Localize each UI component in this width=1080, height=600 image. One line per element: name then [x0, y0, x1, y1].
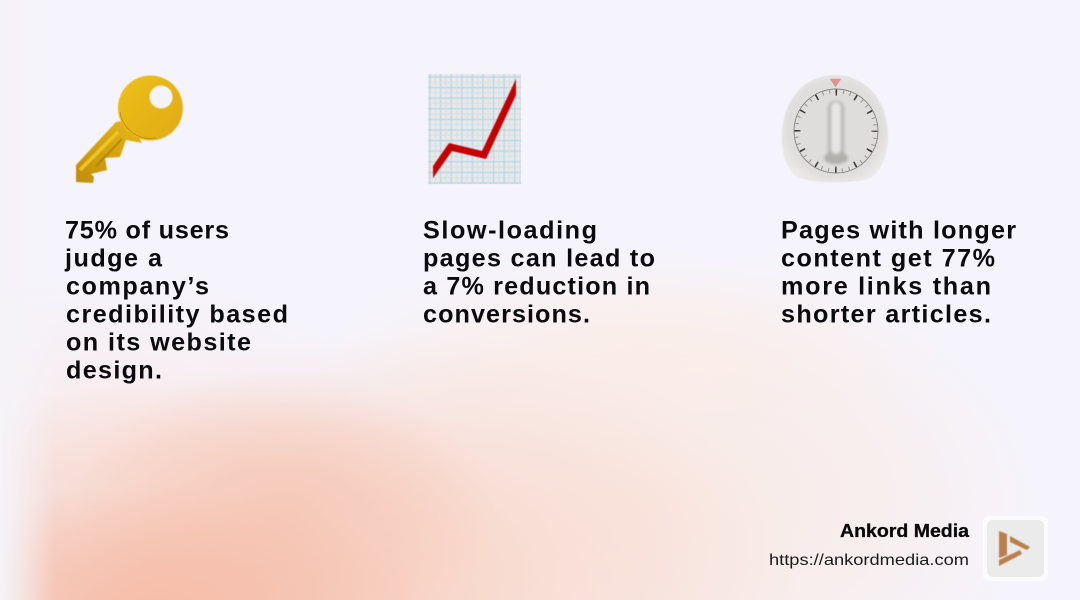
dial — [794, 89, 878, 173]
text: content length statistic: Pages with longer — [781, 216, 1016, 244]
logo — [983, 516, 1048, 581]
logo mark — [999, 531, 1030, 566]
text: credibility statistic: design. — [66, 356, 162, 384]
icon: gold key — [76, 75, 183, 183]
text: content length statistic: more links than — [781, 272, 991, 300]
text: content length statistic: content get 77% — [781, 244, 995, 272]
text: credibility statistic: 75% of users — [65, 216, 229, 244]
text: credibility statistic: credibility based — [66, 300, 288, 328]
chart paper — [428, 74, 521, 184]
brand url: https://ankordmedia.com — [769, 552, 969, 569]
text: conversions statistic: Slow-loading — [423, 216, 597, 244]
red trend line — [433, 79, 516, 178]
text: conversions statistic: conversions. — [423, 300, 590, 328]
pointer — [830, 79, 841, 87]
icon: rising red chart on grid paper — [428, 74, 521, 184]
text: conversions statistic — [423, 216, 655, 328]
knob — [824, 152, 848, 164]
text: conversions statistic: pages can lead to — [423, 244, 655, 272]
text: credibility statistic — [64, 216, 288, 384]
brand name: Ankord Media — [840, 521, 970, 541]
text: credibility statistic: on its website — [66, 328, 251, 356]
text: conversions statistic: a 7% reduction in — [423, 272, 650, 300]
text: credibility statistic: company’s — [66, 272, 209, 300]
text: content length statistic: shorter articles. — [781, 300, 991, 328]
icon: kitchen timer — [782, 75, 888, 182]
text: content length statistic — [781, 216, 1016, 328]
text: credibility statistic: judge a — [64, 244, 163, 272]
